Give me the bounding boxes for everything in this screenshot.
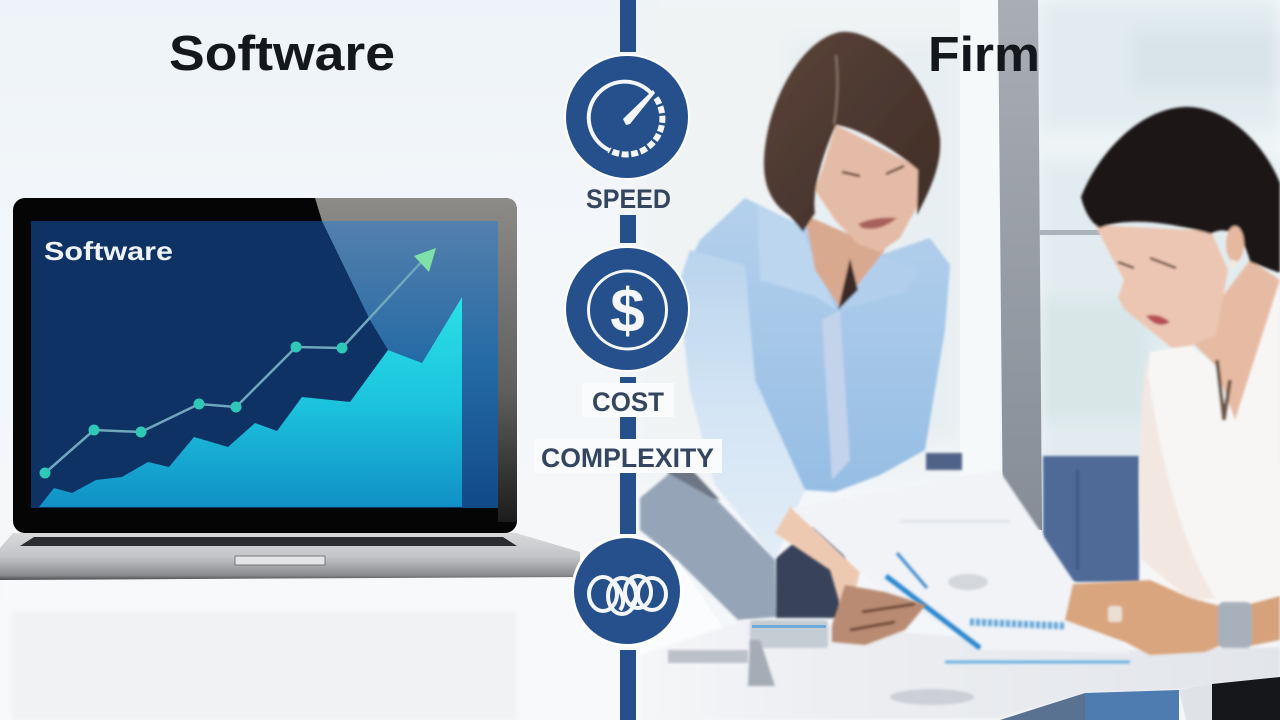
neck [805, 215, 885, 308]
laptop [0, 198, 580, 580]
face [1095, 225, 1228, 348]
bezel glare [315, 198, 517, 522]
ear and earring [1226, 226, 1244, 262]
neck [1190, 260, 1280, 420]
keyboard strip [20, 537, 517, 546]
forearm: woman in blue shirt [775, 506, 860, 625]
window pillar [998, 0, 1042, 530]
eyes and mouth [842, 166, 904, 176]
lips [1146, 315, 1170, 325]
trackpad notch [235, 556, 325, 565]
shirt [678, 198, 950, 560]
area chart [39, 297, 462, 507]
forearm [1250, 596, 1280, 646]
document [791, 470, 1130, 662]
right hand [1065, 580, 1222, 655]
panel: firm office photo [640, 0, 1280, 582]
desk reflection [0, 580, 640, 720]
sofa [926, 453, 1139, 582]
white column [960, 0, 1000, 480]
window rail [1040, 230, 1100, 235]
desk items [750, 620, 828, 648]
arm [1139, 360, 1215, 600]
shirt collar [757, 205, 836, 310]
light sleeve [678, 250, 805, 560]
screen glare [322, 221, 498, 508]
trouser fold [666, 468, 720, 500]
label: speed: SPEED [586, 184, 671, 214]
icon: complexity knot [571, 535, 683, 647]
icon: dollar: $ [610, 277, 645, 346]
dark trousers [776, 500, 845, 618]
shirt placket [822, 310, 850, 480]
ring [1108, 606, 1122, 622]
white top [1140, 272, 1280, 640]
table [640, 560, 1280, 720]
label: complexity: COMPLEXITY [541, 443, 714, 473]
heading: software: Software [169, 27, 395, 81]
left hand [832, 585, 926, 645]
panel: software background [0, 0, 660, 720]
under table [1000, 693, 1085, 720]
line chart with arrow [40, 248, 436, 478]
hair [1081, 107, 1280, 273]
hair parting [834, 55, 837, 124]
icon: speed gauge [564, 54, 690, 180]
icon: dollar [564, 246, 690, 372]
label: cost: COST [592, 387, 664, 417]
necklace [1217, 360, 1230, 420]
heading: firm: Firm [928, 28, 1040, 82]
person: woman in blue shirt [640, 32, 950, 620]
central divider [620, 0, 636, 720]
hair [764, 32, 940, 232]
face [815, 125, 920, 252]
document chart marks [886, 520, 1130, 662]
watch [1218, 602, 1252, 648]
trousers [640, 473, 776, 620]
screen title: Software [44, 236, 173, 266]
screen [31, 221, 498, 508]
hands [832, 580, 1280, 655]
bezel [13, 198, 517, 533]
laptop base [0, 533, 580, 580]
office background [640, 0, 1280, 480]
person: woman in white top [1081, 107, 1280, 640]
